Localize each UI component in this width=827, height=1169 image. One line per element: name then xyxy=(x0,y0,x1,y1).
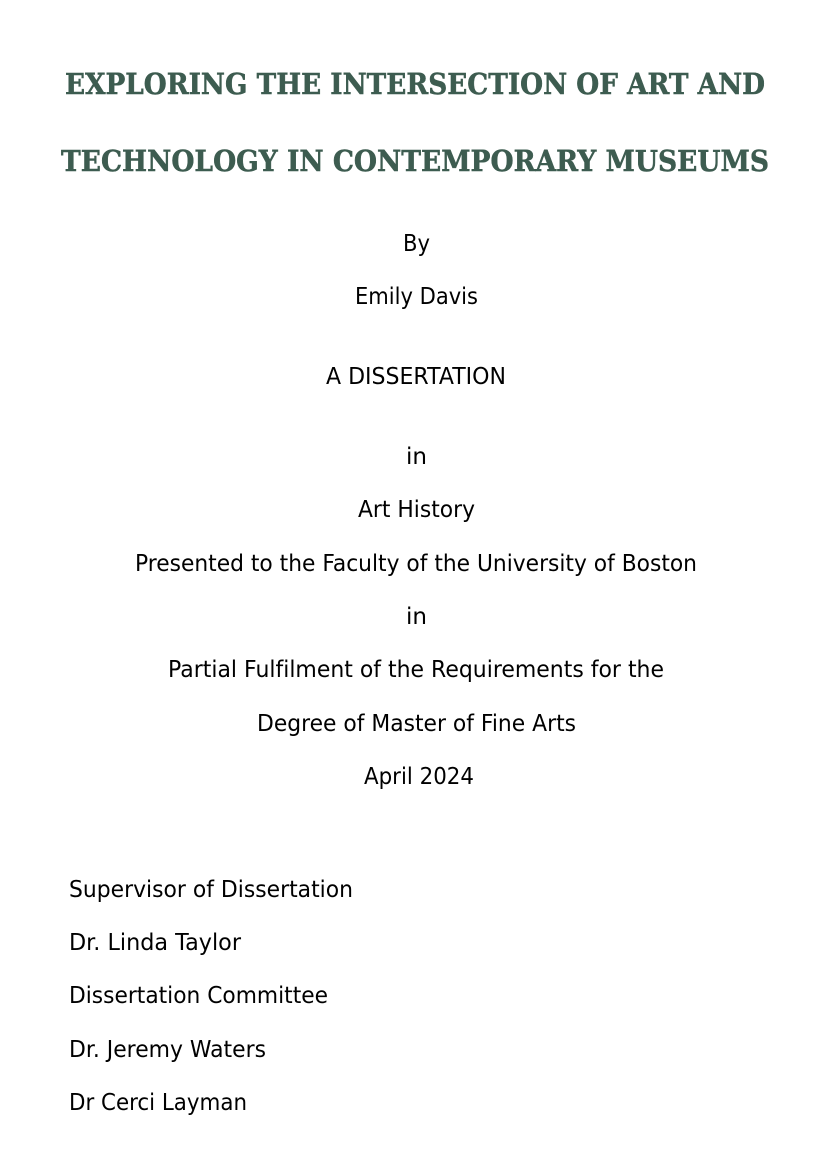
committee list xyxy=(69,877,353,1116)
degree statement: in xyxy=(406,604,427,630)
author block: By xyxy=(403,231,430,257)
degree statement xyxy=(135,444,697,790)
document type: A DISSERTATION xyxy=(326,364,506,390)
title: TECHNOLOGY IN CONTEMPORARY MUSEUMS xyxy=(61,144,769,178)
degree statement: Partial Fulfilment of the Requirements for the xyxy=(168,657,664,683)
committee list: Dissertation Committee xyxy=(69,983,328,1009)
author block xyxy=(355,231,478,310)
degree statement: in xyxy=(406,444,427,470)
committee list: Supervisor of Dissertation xyxy=(69,877,353,903)
committee list: Dr. Jeremy Waters xyxy=(69,1037,266,1063)
degree statement: April 2024 xyxy=(364,764,474,790)
degree statement: Presented to the Faculty of the University of Boston xyxy=(135,551,697,577)
committee list: Dr Cerci Layman xyxy=(69,1090,247,1116)
title: EXPLORING THE INTERSECTION OF ART AND xyxy=(65,67,765,101)
degree statement: Degree of Master of Fine Arts xyxy=(257,711,576,737)
committee list: Dr. Linda Taylor xyxy=(69,930,242,956)
title xyxy=(61,67,769,178)
degree statement: Art History xyxy=(358,497,475,523)
author block: Emily Davis xyxy=(355,284,478,310)
